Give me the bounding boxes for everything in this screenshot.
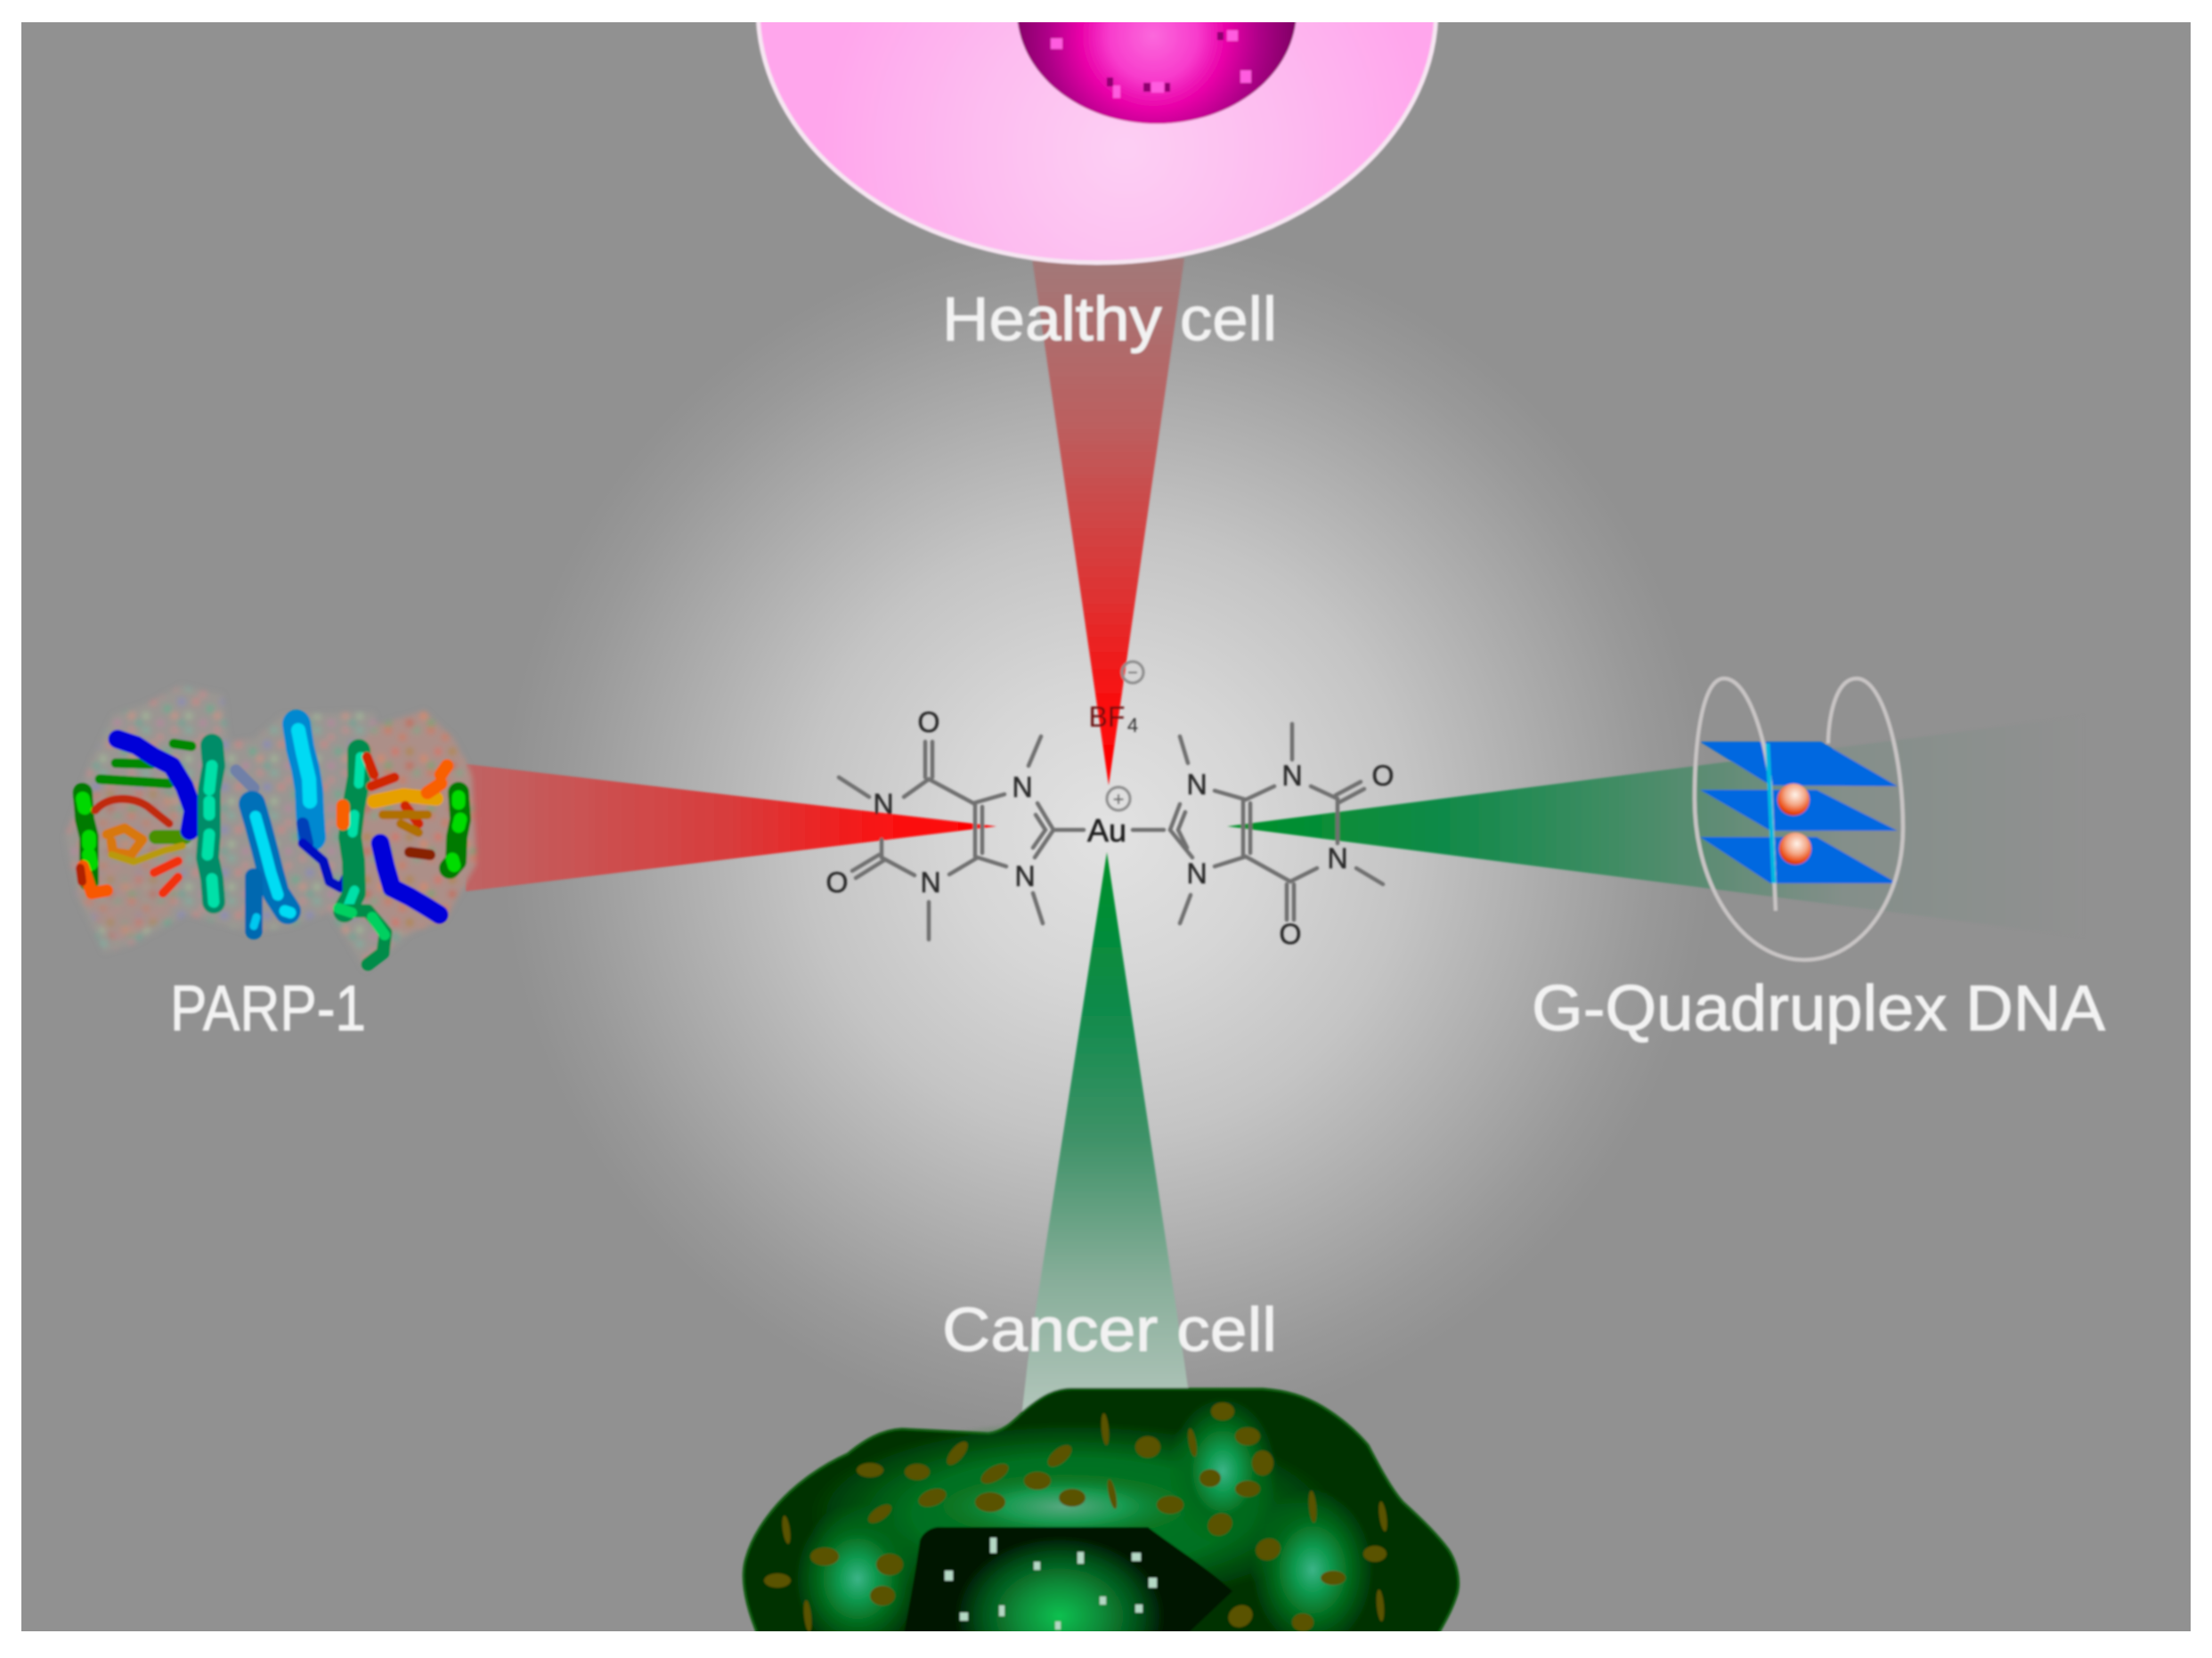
gold atom label: Au (1087, 812, 1126, 849)
atom labels: O (1372, 760, 1394, 792)
mottled coil background (65, 686, 419, 971)
cyan helix middle (252, 804, 288, 911)
arrow: red beam from PARP-1 to complex (466, 764, 996, 891)
green ring right (450, 792, 460, 868)
atom labels: N (1281, 760, 1303, 792)
tetrafluoroborate counterion: BF (1089, 701, 1125, 733)
metal ion lower (1779, 833, 1811, 865)
red and orange coil left (95, 799, 169, 824)
atom labels (826, 706, 1394, 950)
orange cluster (374, 795, 436, 801)
gold NHC complex structure (826, 662, 1394, 950)
cancer cell nucleus (905, 1526, 1232, 1631)
arrow: red beam from healthy cell to complex (1032, 258, 1184, 785)
mottled coil background right (352, 711, 476, 935)
label: Healthy cell: Healthy cell (942, 284, 1277, 354)
teal helix (207, 745, 214, 902)
blue helix lower right (380, 843, 439, 914)
atom labels: O (918, 706, 939, 738)
tetrafluoroborate counterion (1089, 662, 1143, 736)
G-quadruplex DNA (1695, 679, 1903, 960)
arrow: green beam from G-quadruplex DNA to complex (1227, 716, 2084, 937)
atom labels: O (826, 866, 848, 898)
bonds (839, 724, 1383, 939)
PARP-1 protein ribbon (65, 686, 476, 971)
atom labels: N (920, 866, 941, 898)
teal helix right (345, 751, 359, 911)
label: Cancer cell: Cancer cell (942, 1295, 1277, 1364)
mottled coil background left (76, 784, 187, 944)
positive charge (1107, 787, 1130, 810)
metal ion upper (1777, 784, 1809, 816)
label: G-Quadruplex DNA: G-Quadruplex DNA (1532, 973, 2105, 1044)
label: PARP-1: PARP-1 (170, 973, 366, 1044)
atom labels: N (1327, 842, 1348, 874)
atom labels: N (1014, 860, 1036, 892)
green lower strand (345, 911, 386, 964)
cancer cell (744, 1389, 1459, 1658)
atom labels: O (1280, 918, 1301, 950)
atom labels: N (1012, 771, 1033, 803)
quartet planes (1700, 742, 1898, 883)
cyan helix top (297, 724, 312, 837)
positive charge: + (1113, 788, 1124, 810)
tetrafluoroborate counterion: − (1127, 663, 1138, 683)
nucleus of healthy cell (1017, 0, 1297, 124)
blue link (303, 843, 347, 888)
grey link (236, 770, 254, 788)
atom labels: N (873, 788, 894, 820)
arrow: green beam from cancer cell to complex (1021, 852, 1193, 1425)
atom labels: N (1186, 768, 1208, 801)
green strands left (83, 792, 89, 882)
tetrafluoroborate counterion: 4 (1127, 714, 1138, 736)
DNA strand outline (1695, 679, 1903, 960)
blue helix upper left (118, 739, 193, 831)
atom labels: N (1186, 857, 1208, 890)
healthy cell (758, 0, 1436, 263)
organelles (764, 1402, 1388, 1632)
